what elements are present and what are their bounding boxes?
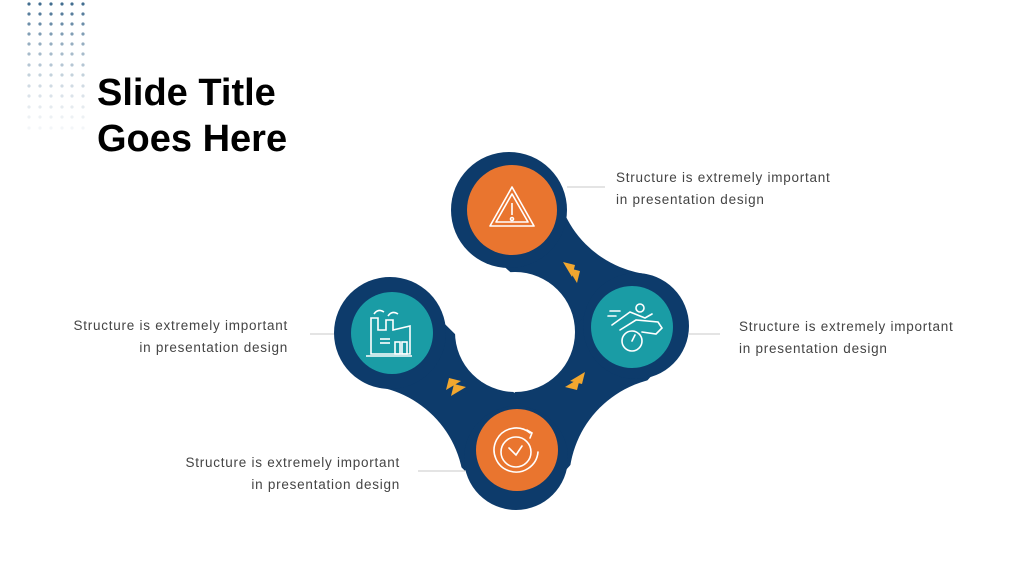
text top: in presentation design [616,192,765,207]
text bottom: in presentation design [251,477,400,492]
text right: in presentation design [739,341,888,356]
title: Slide Title [97,72,276,114]
text bottom [185,455,400,492]
arrows [446,262,585,396]
dot pattern [27,2,85,130]
title [97,72,287,160]
text left: Structure is extremely important [73,318,288,333]
navy shape [254,65,779,576]
text top: Structure is extremely important [616,170,831,185]
title: Goes Here [97,118,287,160]
text right [739,319,954,356]
text left [73,318,288,355]
connector lines [310,187,720,471]
text right: Structure is extremely important [739,319,954,334]
node 2: speed [591,286,673,368]
text top [616,170,831,207]
node 1: warning [467,165,557,255]
text left: in presentation design [139,340,288,355]
text bottom: Structure is extremely important [185,455,400,470]
node 4: factory [351,292,433,374]
node 3: clock [476,409,558,491]
